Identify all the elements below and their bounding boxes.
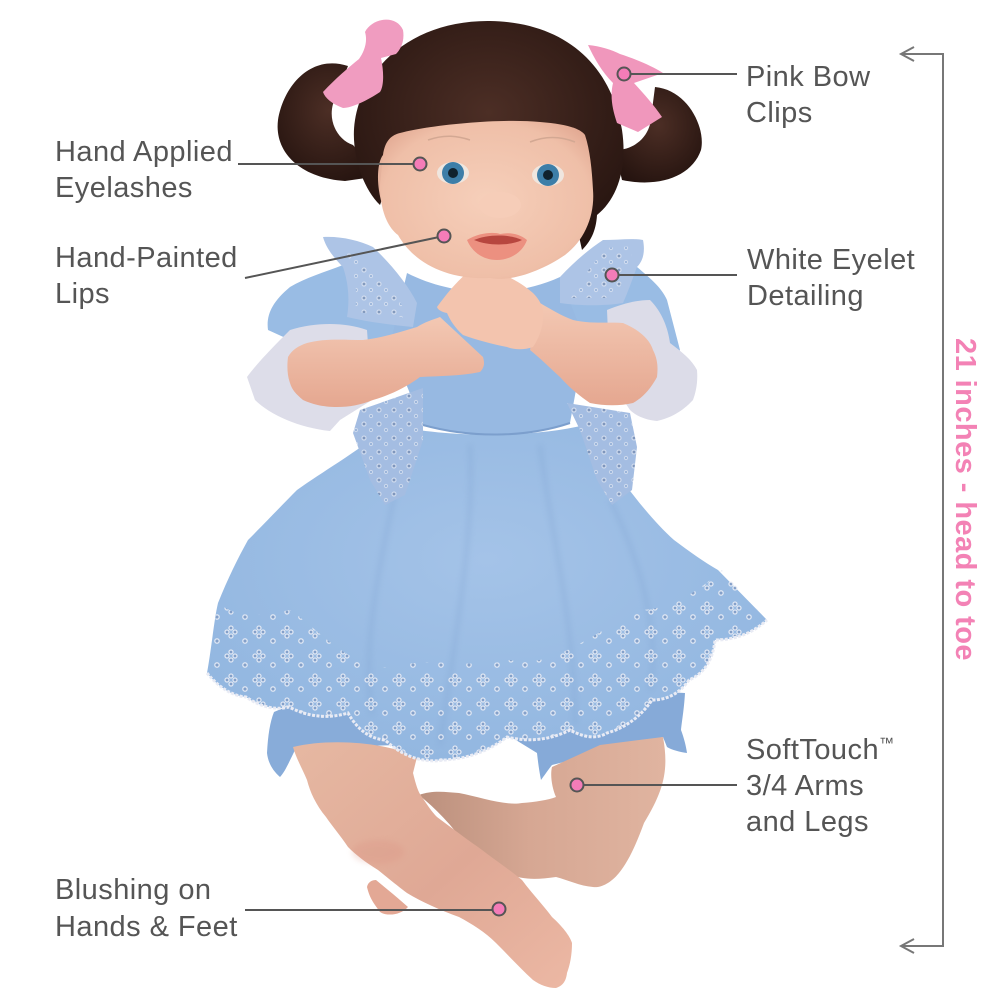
left shoulder ruffle eyelets [345, 250, 408, 318]
height label: 21 inches - head to toe [949, 338, 981, 661]
callout: SoftTouch 3/4 Arms and Legs: SoftTouch [746, 734, 879, 766]
right leg [419, 737, 665, 887]
left shoulder ruffle [323, 237, 417, 327]
left bow [323, 20, 403, 108]
right sleeve [555, 265, 680, 410]
eyelet hem motif [207, 570, 767, 761]
hair cap [354, 21, 624, 250]
clasped hand [437, 271, 543, 349]
face [380, 121, 593, 279]
eyebrows [428, 136, 575, 142]
callout: SoftTouch 3/4 Arms and Legs: 3/4 Arms [746, 770, 864, 802]
shorts right [511, 693, 687, 780]
callout: Blushing on Hands & Feet [55, 874, 506, 943]
right eye [532, 164, 564, 186]
right apron eyelets [567, 403, 637, 505]
callout: SoftTouch 3/4 Arms and Legs: and Legs [746, 806, 869, 838]
right pigtail [615, 87, 702, 182]
foot behind [367, 880, 408, 915]
height bracket arrow [901, 47, 943, 953]
dress skirt [207, 425, 767, 761]
callout: Hand Applied Eyelashes: Hand Applied [55, 136, 233, 168]
callout: Hand-Painted Lips: Lips [55, 278, 110, 310]
callout: Hand Applied Eyelashes: Eyelashes [55, 172, 193, 204]
callout: White Eyelet Detailing [606, 244, 915, 312]
callout: Hand-Painted Lips [55, 230, 450, 310]
nose [479, 192, 521, 218]
callout: SoftTouch 3/4 Arms and Legs [570, 734, 894, 838]
left apron ruffle [353, 388, 423, 505]
left apron eyelets [353, 388, 423, 505]
waist seam [423, 423, 570, 435]
callout: Hand-Painted Lips: Hand-Painted [55, 242, 238, 274]
callout: Pink Bow Clips: Clips [746, 97, 813, 129]
right shoulder ruffle eyelets [568, 246, 635, 298]
right apron ruffle [567, 403, 637, 505]
left sleeve [268, 265, 423, 385]
callout: Hand Applied Eyelashes [55, 136, 426, 204]
knee blush [352, 840, 404, 864]
right shoulder ruffle [560, 239, 644, 305]
left arm [287, 317, 484, 407]
callout: Pink Bow Clips [618, 61, 871, 129]
doll illustration [207, 20, 767, 988]
skirt folds [369, 445, 653, 745]
callout: White Eyelet Detailing: Detailing [747, 280, 864, 312]
bodice [390, 273, 585, 435]
right arm [530, 303, 658, 405]
mouth [467, 233, 527, 260]
ears [378, 155, 400, 222]
left sleeve frill [247, 324, 372, 431]
callout: Pink Bow Clips: Pink Bow [746, 61, 871, 93]
callout: Blushing on Hands & Feet: Hands & Feet [55, 911, 238, 943]
scalloped white edge [207, 620, 767, 761]
left eye [437, 162, 469, 184]
shorts left [267, 703, 400, 777]
left leg [293, 742, 572, 988]
right sleeve frill [607, 300, 697, 421]
callout: SoftTouch 3/4 Arms and Legs: ™ [879, 735, 894, 752]
left pigtail [278, 63, 380, 181]
right bow [588, 45, 663, 132]
callout: Blushing on Hands & Feet: Blushing on [55, 874, 212, 906]
callout: White Eyelet Detailing: White Eyelet [747, 244, 915, 276]
